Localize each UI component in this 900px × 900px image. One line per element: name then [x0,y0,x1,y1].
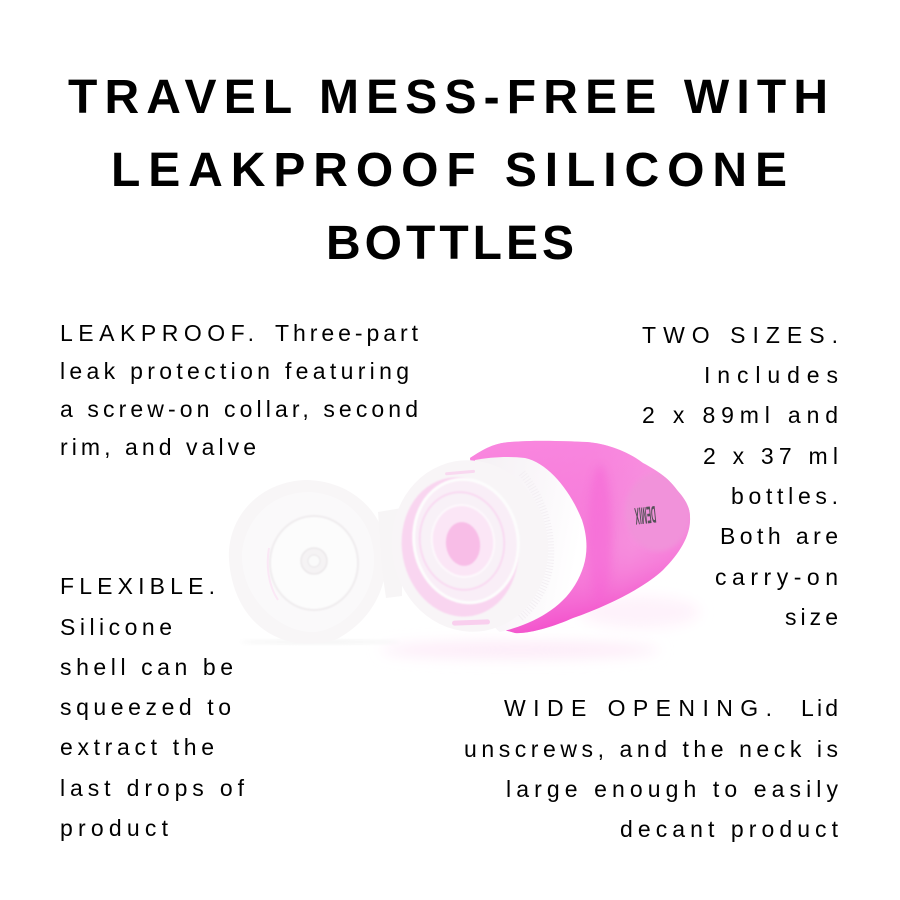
floor shadow [240,596,700,658]
bottle photo illustration [229,435,700,658]
text block: leakproof: a screw-on collar, second [60,396,418,422]
text block: two sizes: Includes [704,362,838,388]
text block: leakproof: Three-part [275,320,419,346]
text block: flexible [60,573,245,841]
text block: wide opening: large enough to easily [506,776,838,802]
text block: flexible: Silicone [60,614,172,640]
text block: wide opening [464,695,839,842]
title [68,71,828,270]
text block: flexible: product [60,815,169,841]
title: BOTTLES [326,217,574,270]
text block: leakproof: LEAKPROOF. [60,320,254,346]
text block: two sizes: 2 x 37 ml [703,443,838,469]
text block: wide opening: Lid [801,695,838,721]
text block: two sizes: 2 x 89ml and [642,402,838,428]
white collar [474,457,586,632]
text block: two sizes: bottles. [731,483,838,509]
text block: wide opening: unscrews, and the neck is [464,736,838,762]
text block: wide opening: WIDE OPENING. [504,695,772,721]
text block: wide opening: decant product [620,816,839,842]
text block: two sizes: carry-on [715,564,838,590]
flip lid [229,480,387,644]
text block: two sizes [642,322,838,630]
text block: leakproof [60,320,419,460]
cap with valve [378,448,562,644]
text block: flexible: squeezed to [60,694,231,720]
title: TRAVEL MESS-FREE WITH [68,71,828,124]
text block: flexible: FLEXIBLE. [60,573,215,599]
hinge [378,508,402,598]
text block: leakproof: leak protection featuring [60,358,409,384]
text block: two sizes: size [785,604,838,630]
text block: leakproof: rim, and valve [60,434,256,460]
title: LEAKPROOF SILICONE [111,144,787,197]
text block: two sizes: Both are [720,523,838,549]
text block: flexible: extract the [60,734,214,760]
text block: flexible: last drops of [60,775,245,801]
text block: flexible: shell can be [60,654,233,680]
text block: two sizes: TWO SIZES. [642,322,838,348]
pink bottle body: DEMIX [633,500,657,529]
pink bottle body [470,440,690,634]
